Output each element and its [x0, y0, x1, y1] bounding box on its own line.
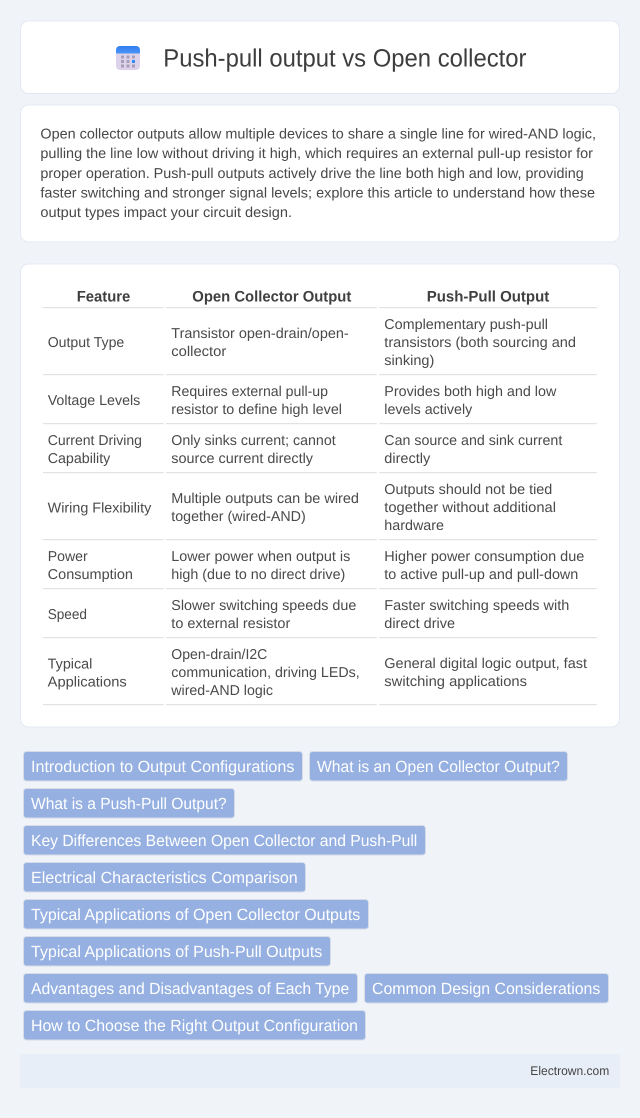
- table row: Output Type: sinking): [384, 353, 434, 369]
- table row: Power Consumption: Higher power consumption due: [384, 549, 584, 565]
- text block: introduction paragraph: pulling the line low without driving it high, which requires an external pull-up resistor for: [40, 146, 593, 162]
- table row: Speed: Faster switching speeds with: [384, 598, 569, 614]
- tag: Key Differences Between Open Collector and Push-Pull: [24, 826, 426, 855]
- table row: Current Driving Capability: source current directly: [171, 451, 314, 467]
- table row: Wiring Flexibility: Wiring Flexibility: [48, 500, 152, 516]
- text block: introduction paragraph: Open collector outputs allow multiple devices to share a single line for wired-AND logic,: [40, 127, 596, 143]
- table row: Speed: to external resistor: [171, 616, 291, 632]
- tag: Typical Applications of Push-Pull Outputs: Typical Applications of Push-Pull Outputs: [31, 943, 322, 961]
- table row: Output Type: [43, 317, 597, 375]
- tag: Advantages and Disadvantages of Each Type: [24, 974, 358, 1003]
- table row: Typical Applications: wired-AND logic: [170, 683, 273, 699]
- table row: Voltage Levels: Voltage Levels: [48, 393, 140, 409]
- tag: Typical Applications of Open Collector Outputs: Typical Applications of Open Collector Outputs: [31, 906, 360, 924]
- table row: Power Consumption: Consumption: [48, 567, 133, 583]
- table header row: [43, 289, 597, 308]
- table row: Power Consumption: [43, 549, 597, 589]
- tag: Key Differences Between Open Collector and Push-Pull: Key Differences Between Open Collector and Push-Pull: [31, 832, 417, 850]
- table header row: Feature: [77, 289, 130, 306]
- tag: How to Choose the Right Output Configuration: How to Choose the Right Output Configuration: [31, 1017, 358, 1035]
- text block: introduction paragraph: proper operation. Push-pull outputs actively drive the line both high and low, providing: [40, 166, 584, 182]
- table row: Output Type: Complementary push-pull: [384, 317, 548, 333]
- panel: introduction: [20, 105, 620, 242]
- footer: Electrown.com: [530, 1064, 609, 1078]
- text block: introduction paragraph: output types impact your circuit design.: [40, 205, 292, 221]
- panel: title card: [20, 21, 620, 94]
- table row: Wiring Flexibility: [43, 482, 597, 540]
- table row: Power Consumption: to active pull-up and pull-down: [384, 567, 578, 583]
- table row: Output Type: Output Type: [48, 335, 124, 351]
- table row: Wiring Flexibility: hardware: [384, 518, 444, 534]
- table row: Current Driving Capability: directly: [384, 451, 431, 467]
- panel: topic tags: [24, 752, 608, 1040]
- table row: Output Type: Transistor open-drain/open-: [171, 326, 349, 342]
- table row: Typical Applications: communication, driving LEDs,: [171, 665, 360, 681]
- table row: Voltage Levels: levels actively: [384, 402, 473, 418]
- tag: Electrical Characteristics Comparison: Electrical Characteristics Comparison: [31, 869, 298, 887]
- table row: Current Driving Capability: Capability: [48, 451, 111, 467]
- table row: Power Consumption: high (due to no direct drive): [171, 567, 345, 583]
- text block: introduction paragraph: [40, 127, 596, 221]
- table row: Wiring Flexibility: together without additional: [384, 500, 556, 516]
- tag: What is a Push-Pull Output?: [24, 788, 234, 818]
- table row: Output Type: transistors (both sourcing and: [384, 335, 576, 351]
- table row: Speed: direct drive: [384, 616, 455, 632]
- table row: Speed: [43, 598, 597, 638]
- tag: Typical Applications of Open Collector Outputs: [24, 900, 368, 929]
- table row: Typical Applications: Open-drain/I2C: [171, 647, 267, 663]
- tag: What is an Open Collector Output?: [310, 752, 568, 781]
- title: Push-pull output vs Open collector: [163, 45, 527, 73]
- icon: calendar: [116, 46, 140, 70]
- table row: Wiring Flexibility: together (wired-AND): [171, 509, 306, 525]
- table row: Typical Applications: Typical: [48, 656, 92, 672]
- table row: Output Type: collector: [171, 344, 227, 360]
- table row: Current Driving Capability: Current Driving: [48, 433, 142, 449]
- tag: Introduction to Output Configurations: [24, 752, 302, 781]
- table row: Current Driving Capability: Only sinks current; cannot: [171, 433, 336, 449]
- tag: Electrical Characteristics Comparison: [24, 862, 306, 892]
- tag: What is a Push-Pull Output?: What is a Push-Pull Output?: [31, 795, 227, 813]
- table row: Speed: Slower switching speeds due: [171, 598, 356, 614]
- tag: Common Design Considerations: [364, 974, 608, 1003]
- tag: Advantages and Disadvantages of Each Type: Advantages and Disadvantages of Each Type: [31, 980, 349, 998]
- table row: Wiring Flexibility: Outputs should not be tied: [384, 482, 552, 498]
- table row: Voltage Levels: Provides both high and low: [384, 384, 557, 400]
- table row: Current Driving Capability: Can source and sink current: [384, 433, 562, 449]
- table row: Voltage Levels: [43, 384, 597, 424]
- footer: [20, 1054, 620, 1088]
- tag: Typical Applications of Push-Pull Outputs: [24, 936, 330, 966]
- tag: Common Design Considerations: Common Design Considerations: [372, 980, 600, 998]
- table row: Power Consumption: Power: [48, 549, 88, 565]
- table row: Wiring Flexibility: Multiple outputs can be wired: [171, 491, 359, 507]
- table row: Current Driving Capability: [43, 433, 597, 473]
- table row: Power Consumption: Lower power when output is: [171, 549, 350, 565]
- tag: What is an Open Collector Output?: What is an Open Collector Output?: [317, 758, 560, 776]
- table row: Typical Applications: Applications: [48, 674, 127, 690]
- table row: Voltage Levels: Requires external pull-up: [171, 384, 328, 400]
- tag: Introduction to Output Configurations: Introduction to Output Configurations: [31, 758, 294, 776]
- tag: How to Choose the Right Output Configuration: [24, 1010, 366, 1040]
- table row: Typical Applications: switching applications: [384, 674, 527, 690]
- table row: Speed: Speed: [48, 607, 87, 623]
- table row: Voltage Levels: resistor to define high level: [171, 402, 342, 418]
- table header row: Open Collector Output: [192, 289, 351, 306]
- table row: Typical Applications: [43, 647, 597, 705]
- panel: comparison table: [20, 264, 620, 727]
- text block: introduction paragraph: faster switching and stronger signal levels; explore this article to understand how these: [40, 186, 595, 202]
- table header row: Push-Pull Output: [427, 289, 549, 306]
- table row: Typical Applications: General digital logic output, fast: [384, 656, 587, 672]
